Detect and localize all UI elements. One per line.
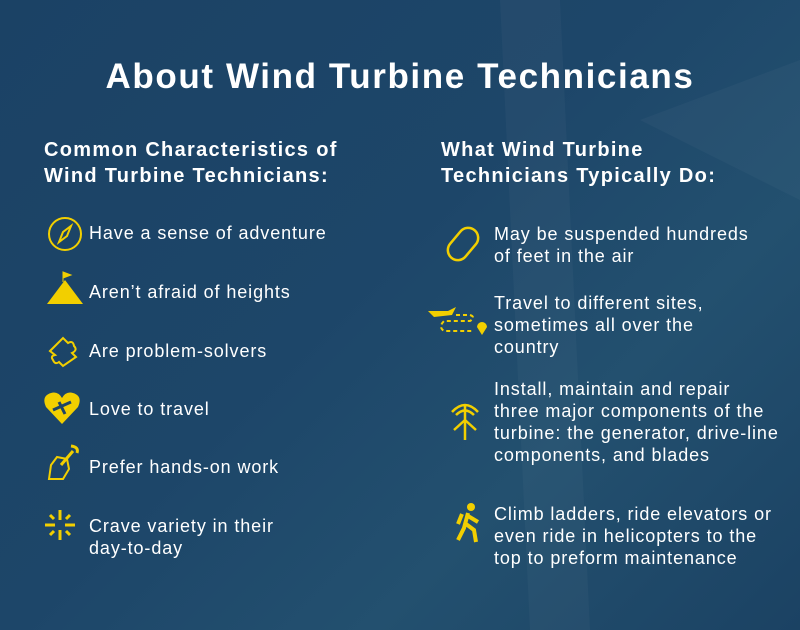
heading: characteristics: Wind Turbine Technicians: xyxy=(44,165,329,187)
text: variety: Crave variety in their xyxy=(89,516,274,536)
text: problem solvers: Are problem-solvers xyxy=(89,341,267,361)
text: suspended xyxy=(494,224,749,266)
text: adventure: Have a sense of adventure xyxy=(89,223,327,243)
text: install: turbine: the generator, drive-line xyxy=(494,423,779,443)
icon: hand wrench xyxy=(48,444,79,480)
icon: heart plane xyxy=(44,392,80,424)
text: install: three major components of the xyxy=(494,401,764,421)
text: suspended: May be suspended hundreds xyxy=(494,224,749,244)
text: climb: Climb ladders, ride elevators or xyxy=(494,504,772,524)
text: variety: day-to-day xyxy=(89,538,183,558)
text: heights: Aren’t afraid of heights xyxy=(89,282,291,302)
text: suspended: of feet in the air xyxy=(494,246,634,266)
text: travel sites xyxy=(494,293,703,357)
heading: what they do: What Wind Turbine xyxy=(441,139,644,161)
icon: carabiner xyxy=(446,226,480,262)
text: install xyxy=(494,379,779,465)
title: About Wind Turbine Technicians xyxy=(106,57,694,96)
text: climb xyxy=(494,504,772,568)
text: variety xyxy=(89,516,274,558)
heading: characteristics: Common Characteristics of xyxy=(44,139,338,161)
heading: what they do: Technicians Typically Do: xyxy=(441,165,716,187)
icon: mountain xyxy=(47,271,83,304)
heading: characteristics xyxy=(44,139,338,187)
icon: puzzle xyxy=(48,336,78,368)
text: travel sites: country xyxy=(494,337,559,357)
icon: turbine xyxy=(451,404,479,440)
icon: plane route xyxy=(428,307,487,335)
text: climb: even ride in helicopters to the xyxy=(494,526,757,546)
heading: what they do xyxy=(441,139,716,187)
text: install: components, and blades xyxy=(494,445,710,465)
icon: burst xyxy=(45,510,75,540)
text: travel sites: Travel to different sites, xyxy=(494,293,703,313)
text: travel: Love to travel xyxy=(89,399,210,419)
icon: hiker xyxy=(456,503,479,542)
text: hands-on: Prefer hands-on work xyxy=(89,457,279,477)
icon: compass xyxy=(48,217,82,251)
text: install: Install, maintain and repair xyxy=(494,379,730,399)
text: climb: top to preform maintenance xyxy=(494,548,738,568)
text: travel sites: sometimes all over the xyxy=(494,315,694,335)
